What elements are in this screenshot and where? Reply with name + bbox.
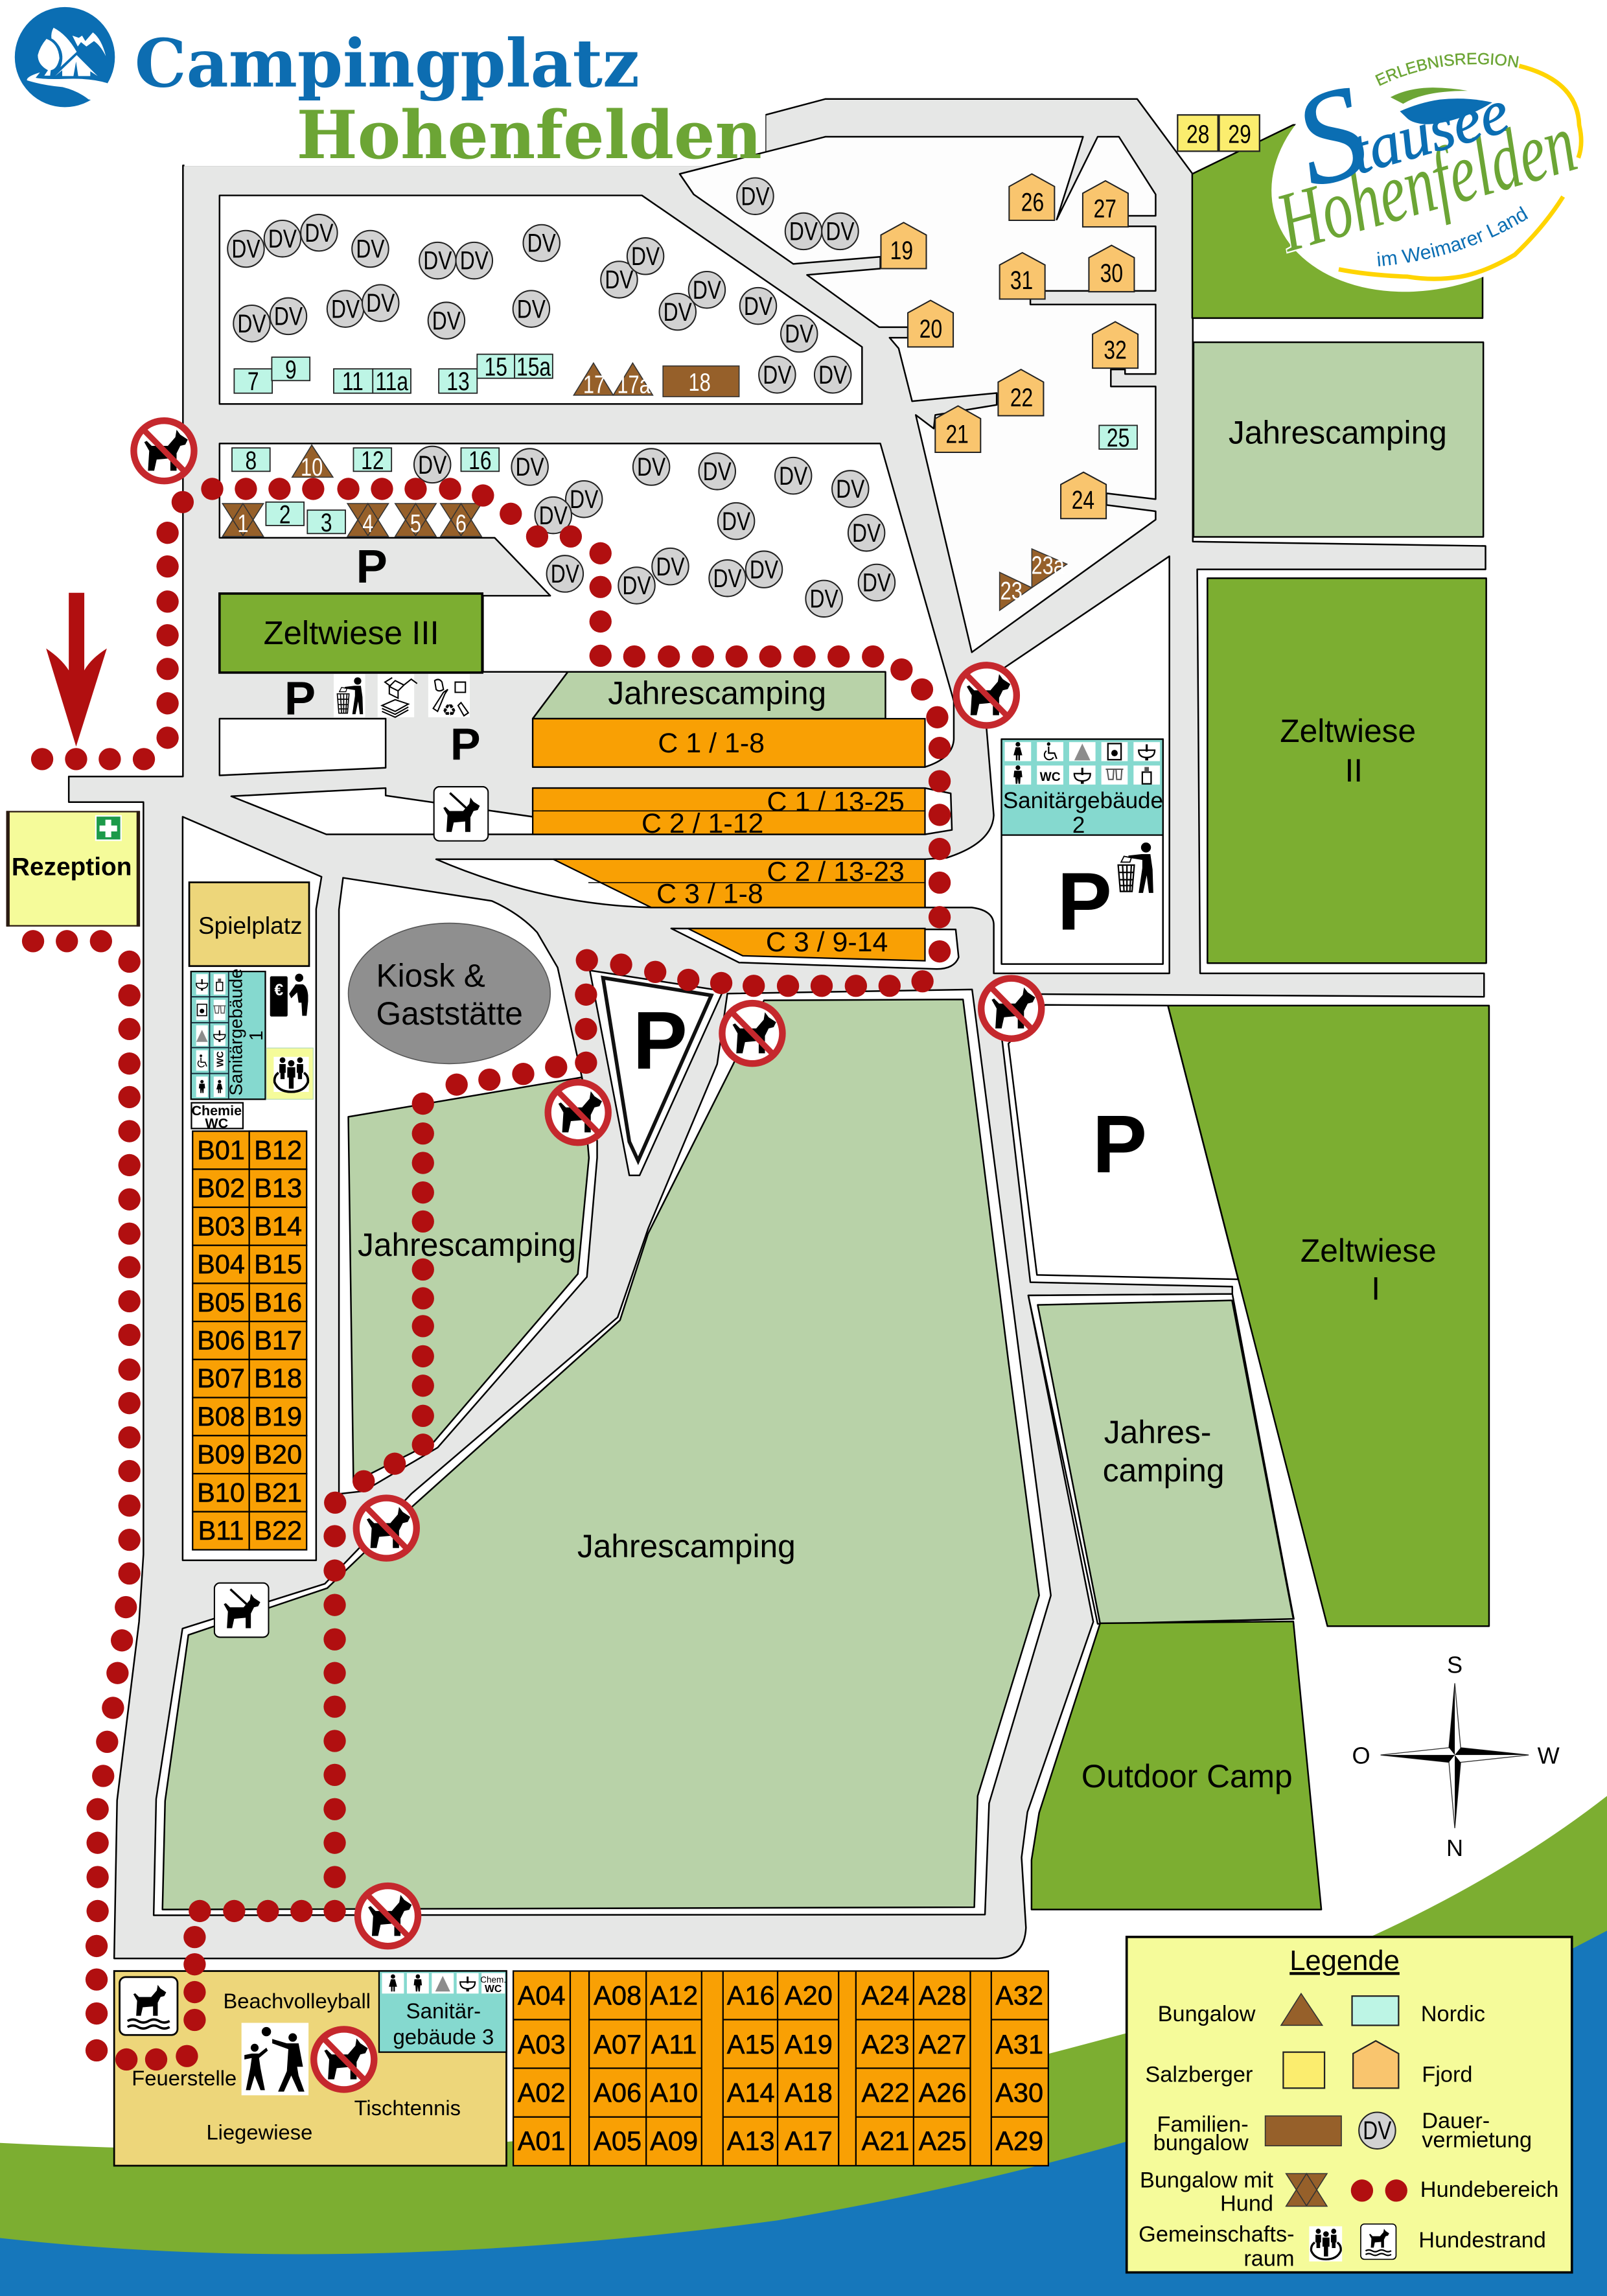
north DV pitches circles: DV [231,234,260,264]
north DV pitches circles [227,178,859,393]
icon: dog beach sign [120,1977,178,2035]
parking triangle: P [632,995,688,1086]
waste and recycling icons [334,674,470,720]
Sanitaergebaeude 3: WC [485,1984,502,1995]
area: Jahres-camping east [1028,1294,1294,1624]
Sanitaergebaeude 3: Sanitär- [406,1999,481,2023]
bungalow 23: 23 [1000,577,1023,605]
Sanitaergebaeude 2 with parking [1002,739,1163,964]
pitch grid B: B12 [254,1135,302,1165]
legend: Gemeinschaftsraum: Gemeinschafts- [1139,2222,1295,2247]
north DV pitches circles: DV [605,265,633,294]
Nordic cabins: 8 [246,446,257,475]
north DV pitches circles: DV [785,319,813,349]
area: Jahrescamping middle [533,672,885,719]
north DV pitches circles: DV [237,308,266,338]
south DV pitches circles [414,446,895,617]
pitch grid A: A19 [785,2029,833,2059]
area: sanitary and parking block east [925,556,1170,973]
compass [1352,1652,1560,1861]
area: sliver beside C2 C3 rows [436,859,925,907]
pitch grid B: B07 [197,1363,245,1393]
label: Feuerstelle: Feuerstelle [132,2066,237,2090]
pitch grid B: B09 [197,1439,245,1470]
Fjord cabins: 30 [1100,259,1123,288]
north DV pitches circles: DV [631,242,660,271]
north DV pitches circles: DV [517,294,546,323]
dog area dotted route [22,478,951,2070]
area: Zeltwiese III: Zeltwiese III [264,614,439,651]
parking triangle [590,971,723,1176]
Nordic cabins: 9 [285,355,297,384]
pitch grid A: A23 [862,2029,909,2059]
pitches C 1 / 13-25 and C 2 / 1-12: C 1 / 13-25 [767,786,905,817]
pitch grid A: A17 [785,2126,833,2156]
icon: cash machine: € [274,982,283,999]
north DV pitches circles: DV [789,216,818,246]
Nordic cabins: 16 [468,446,492,475]
south DV pitches circles: DV [622,571,651,600]
logo: Stausee Hohenfelden region badge: im Weimarer Land [1378,206,1528,266]
label: Tischtennis: Tischtennis [354,2096,461,2120]
bungalow 10: 10 [301,454,323,481]
area: sliver beside C3 9-14 row [671,929,958,969]
road network [69,99,1486,1958]
pitch grid B: B14 [254,1211,302,1241]
Sanitaergebaeude 3: Chem. [480,1975,506,1984]
pitch grid A: A30 [995,2077,1043,2107]
Nordic cabins: 11a [375,367,409,396]
Nordic cabins: 15a [516,352,551,381]
area: Zeltwiese II: Zeltwiese [1280,713,1416,749]
pitch grid A: A10 [650,2077,698,2107]
legend: Fjord [1353,2041,1472,2088]
south DV pitches circles: DV [852,518,881,548]
Fjord cabins: 27 [1094,194,1116,223]
legend [1127,1937,1572,2273]
bungalow 10 [292,445,333,481]
Kiosk and restaurant: Gaststätte [376,995,523,1032]
label: Jahrescamping main: Jahrescamping [577,1528,796,1564]
pitch grid B: B16 [254,1287,302,1317]
south DV pitches circles: DV [836,474,864,504]
Salzberger cabins 28 and 29: 28 [1186,119,1209,148]
Salzberger cabins 28 and 29: 29 [1228,119,1251,148]
Rezeption building: Rezeption [12,853,132,881]
legend: Dauervermietung [1359,2109,1532,2152]
Nordic cabins: 12 [361,446,384,475]
pitch grid A: A02 [518,2077,566,2107]
Sanitaergebaeude 3 [379,1971,506,2052]
pitch grid A: A09 [650,2126,698,2156]
logo: Stausee Hohenfelden region badge: ERLEBNISREGION [1375,53,1519,86]
label: Liegewiese: Liegewiese [206,2120,312,2144]
north DV pitches circles: DV [664,297,692,327]
legend: Bungalow [1158,1993,1323,2026]
parking signs north: P [284,673,316,725]
compass: W [1538,1743,1560,1769]
area: north DV pitches [220,196,862,404]
compass: S [1447,1652,1462,1678]
bungalow 17a [613,363,653,399]
legend: Fjord: Fjord [1422,2063,1472,2087]
icon: community room [266,1048,313,1099]
area: Zeltwiese I [1168,1006,1489,1626]
entrance arrow [46,593,107,747]
area: Jahres-camping east: Jahres- [1104,1414,1211,1450]
parking signs north: P [356,541,387,593]
area: Zeltwiese II: II [1345,752,1363,789]
pitch grid A: A04 [518,1980,566,2010]
Sanitaergebaeude 2 with parking: 2 [1072,813,1085,838]
logo: Stausee Hohenfelden region badge: Stausee [1279,17,1520,215]
legend: Salzberger: Salzberger [1145,2063,1253,2087]
Sanitaergebaeude 1: Sanitärgebäude [225,969,246,1096]
south DV pitches circles: DV [551,559,579,588]
area: Outdoor Camp: Outdoor Camp [1081,1758,1293,1794]
legend: Bungalow mit Hund: Hund [1220,2192,1273,2216]
pitch grid B: B03 [197,1211,245,1241]
pitch grid B: B08 [197,1401,245,1432]
north DV pitches circles: DV [744,291,772,321]
pitch grid B: B18 [254,1363,302,1393]
pitch grid A: A21 [862,2126,909,2156]
dog-friendly bungalows: 5 [410,510,421,538]
title: Hohenfelden: Hohenfelden [297,97,762,174]
north DV pitches circles: DV [305,218,333,248]
Spielplatz: Spielplatz [198,912,303,939]
blue lake [0,1931,1607,2296]
icon: glass recycling: ♻ [442,701,457,720]
north DV pitches circles: DV [268,224,297,253]
pitch grid A: A24 [862,1980,909,2010]
Nordic cabins [232,352,1137,537]
north DV pitches circles: DV [274,301,303,330]
area: Jahrescamping middle: Jahrescamping [608,675,826,711]
Sanitaergebaeude 1 [191,969,267,1099]
family bungalow 18: 18 [689,369,711,397]
legend: Nordic: Nordic [1421,2002,1485,2026]
pitch grid B: B04 [197,1249,245,1279]
pitch grid B: B15 [254,1249,302,1279]
north DV pitches circles: DV [331,294,360,323]
Fjord cabins: 22 [1010,382,1033,412]
pitch grid B: B06 [197,1325,245,1356]
pitch grid A: A07 [594,2029,642,2059]
bungalow 17a: 17a [617,371,651,399]
south DV pitches circles: DV [418,450,446,480]
pitches C 2 / 13-23 and C 3 / 1-8 [553,857,925,910]
parking lot east [1008,1005,1238,1279]
pitch grid B: B19 [254,1401,302,1432]
south DV pitches circles: DV [810,584,838,613]
north DV pitches circles: DV [527,228,556,257]
south DV pitches circles: DV [570,484,598,514]
area: west Jahrescamping field [349,1077,589,1482]
bungalow 23 [1000,572,1032,610]
pitch grid A: A16 [727,1980,775,2010]
dog-friendly bungalows: 1 [237,510,249,538]
legend: Salzberger [1145,2052,1324,2088]
dog-friendly bungalows: 6 [456,510,467,538]
pitch grid A: A27 [919,2029,967,2059]
legend: Familienbungalow [1153,2112,1341,2155]
family bungalow 18 [663,366,739,397]
beach recreation area [114,1971,506,2166]
Fjord cabins: 26 [1021,187,1044,216]
south DV pitches circles: DV [779,461,807,491]
Nordic cabins: 3 [321,508,332,537]
icon: volleyball players [242,2023,308,2095]
area: Zeltwiese II [1207,578,1486,963]
legend: Hundestrand: Hundestrand [1418,2228,1546,2253]
north DV pitches circles: DV [741,181,770,211]
Sanitaergebaeude 1: 1 [246,1030,267,1041]
legend: Gemeinschaftsraum: raum [1243,2246,1295,2271]
pitch grid A: A32 [995,1980,1043,2010]
parking signs north [284,541,481,769]
bungalow 23a [1032,549,1067,588]
pitch grid A: A28 [919,1980,967,2010]
pitch grid B: B13 [254,1173,302,1203]
Rezeption building [6,811,140,927]
pitch grid A: A03 [518,2029,566,2059]
compass: N [1446,1835,1463,1861]
north DV pitches circles: DV [693,275,721,305]
dog-friendly bungalows [222,504,481,538]
north DV pitches circles: DV [763,360,791,389]
pitches C 2 / 13-23 and C 3 / 1-8: C 3 / 1-8 [656,879,763,910]
bungalow 17 [573,363,613,399]
bungalow 17: 17 [583,371,605,399]
white border of main field [154,990,1051,1915]
Kiosk and restaurant: Kiosk & [376,957,485,993]
Nordic cabins: 7 [248,367,259,396]
pitches C 1 / 13-25 and C 2 / 1-12 [533,786,925,839]
legend: Dauervermietung: vermietung [1422,2128,1532,2152]
legend: Bungalow mit Hund: Bungalow mit [1140,2168,1273,2192]
south DV pitches circles: DV [713,563,742,593]
pitch grid A: A14 [727,2077,775,2107]
pitch grid A [513,1971,1048,2166]
brown bungalows [292,363,1067,610]
pitch grid B: B05 [197,1287,245,1317]
pitch C 1 / 1-8 [533,719,925,767]
area: north-east bungalow field [680,137,1155,652]
south DV pitches circles: DV [637,452,665,481]
pitch grid A: A01 [518,2126,566,2156]
pitch grid B: B17 [254,1325,302,1356]
Sanitaergebaeude 2 with parking: WC [1040,771,1061,784]
label: Jahrescamping west: Jahrescamping [358,1227,576,1263]
Sanitaergebaeude 2 with parking: Sanitärgebäude [1003,788,1163,813]
Sanitaergebaeude 2 with parking: P [1057,855,1112,947]
area: Jahres-camping east: camping [1103,1452,1225,1489]
pitch grid A: A25 [919,2126,967,2156]
parking lot east: P [1093,1098,1147,1190]
Fjord cabins: 21 [945,419,969,448]
Nordic cabins: 11 [342,367,364,396]
area: green meadow top right [1192,125,1483,318]
pitch grid A: A12 [650,1980,698,2010]
pitch C 3 / 9-14 [688,927,925,961]
pitch grid A: A26 [919,2077,967,2107]
area: strip with playground and B pitches [183,817,321,1560]
Fjord cabins: 24 [1072,485,1094,515]
icon: glass recycling [428,674,470,720]
south DV pitches circles: DV [862,568,891,597]
pitch grid A: A05 [594,2126,642,2156]
pitch grid B: B21 [254,1477,302,1507]
north DV pitches circles: DV [818,360,847,389]
pitches C 2 / 13-23 and C 3 / 1-8: C 2 / 13-23 [767,857,905,888]
Chemie WC label [191,1103,243,1131]
legend: Hundebereich [1351,2177,1559,2202]
pitches C 1 / 13-25 and C 2 / 1-12: C 2 / 1-12 [642,808,763,839]
pitch grid A: A11 [651,2029,697,2059]
pitch grid B: B10 [197,1477,245,1507]
pitch grid A: A15 [727,2029,775,2059]
Spielplatz [189,883,309,966]
area: Jahrescamping north-east: Jahrescamping [1229,414,1447,450]
legend: Dauervermietung: DV [1363,2116,1391,2145]
north DV pitches circles: DV [366,288,395,318]
main Jahrescamping field [163,999,1039,1910]
pitch grid B: B01 [197,1135,245,1165]
Chemie WC label: WC [205,1115,228,1131]
area: Zeltwiese III [220,594,482,673]
legend: Bungalow mit Hund [1140,2168,1327,2216]
south DV pitches circles: DV [516,452,544,481]
area: Jahrescamping north-east [1194,342,1483,537]
icon: cash machine [270,973,308,1017]
pitch grid A: A22 [862,2077,909,2107]
Nordic cabins: 15 [485,352,507,381]
pitch grid B [192,1131,306,1550]
icon: litter bin [334,674,365,717]
Sanitaergebaeude 3: gebäude 3 [393,2024,494,2048]
legend: Familienbungalow: bungalow [1153,2131,1249,2155]
bungalow 23a: 23a [1032,551,1065,579]
Fjord cabins: 32 [1104,335,1127,364]
legend: Hundestrand [1361,2224,1546,2259]
legend title: Legende [1289,1945,1400,1977]
pitch grid A: A31 [995,2029,1043,2059]
Salzberger cabins 28 and 29 [1177,115,1260,151]
Chemie WC label: Chemie [192,1103,242,1119]
logo: campsite emblem [15,7,115,107]
south DV pitches circles: DV [750,555,778,584]
south DV pitches circles: DV [703,457,732,486]
pitch C 3 / 9-14: C 3 / 9-14 [766,927,888,958]
Fjord cabins [881,174,1138,518]
area: kiosk field [339,878,597,1494]
south DV pitches circles: DV [539,500,568,530]
Fjord cabins: 20 [919,314,942,343]
pitch grid B: B22 [254,1515,302,1546]
area: sliver beside C1 C2 rows [231,788,952,834]
north DV pitches circles: DV [432,306,461,335]
parking signs north: P [450,719,481,769]
north DV pitches circles: DV [423,246,452,275]
compass: O [1352,1743,1370,1769]
pitch grid B: B11 [198,1515,244,1546]
legend: Dauervermietung: Dauer- [1422,2109,1490,2133]
label: Beachvolleyball: Beachvolleyball [223,1989,371,2013]
pitch grid A: A06 [594,2077,642,2107]
pitch grid A: A29 [995,2126,1043,2156]
pitch rows C [533,719,925,961]
dog-friendly bungalows: 4 [362,510,373,538]
legend: Gemeinschaftsraum [1139,2222,1342,2271]
pitch grid A: A13 [727,2126,775,2156]
dogs-on-leash signs [214,787,488,1637]
Nordic cabins: 25 [1107,423,1129,452]
Fjord cabins: 31 [1010,266,1033,295]
north DV pitches circles: DV [356,234,385,264]
south DV pitches circles: DV [656,551,685,581]
green shoreline band [0,1796,1607,2296]
area: Outdoor Camp [1032,1621,1321,1910]
pitch grid A: A18 [785,2077,833,2107]
south DV pitches circles: DV [722,506,750,536]
north DV pitches circles: DV [460,246,489,275]
north DV pitches circles: DV [826,216,855,246]
pitch C 1 / 1-8: C 1 / 1-8 [658,728,765,759]
area: Zeltwiese I: I [1371,1271,1380,1307]
Nordic cabins: 13 [446,367,470,396]
legend: Nordic [1352,1996,1485,2026]
legend: Bungalow: Bungalow [1158,2002,1256,2026]
Fjord cabins: 19 [890,236,913,265]
Sanitaergebaeude 1: WC [215,1051,225,1067]
no-dog signs [133,421,1041,2089]
title: Campingplatz: Campingplatz [135,25,640,102]
Nordic cabins: 2 [279,500,291,529]
area: white lot beside parking [220,719,386,775]
icon: paper and cardboard [378,674,417,717]
white title background [185,0,765,166]
Kiosk and restaurant [349,923,550,1063]
pitch grid B: B20 [254,1439,302,1470]
legend: Familienbungalow: Familien- [1157,2112,1249,2137]
area: south DV pitches [220,443,954,767]
legend: Hundebereich: Hundebereich [1420,2177,1559,2202]
pitch grid B: B02 [197,1173,245,1203]
area: Zeltwiese I: Zeltwiese [1301,1233,1437,1269]
pitch grid A: A08 [594,1980,642,2010]
pitch grid A: A20 [785,1980,833,2010]
